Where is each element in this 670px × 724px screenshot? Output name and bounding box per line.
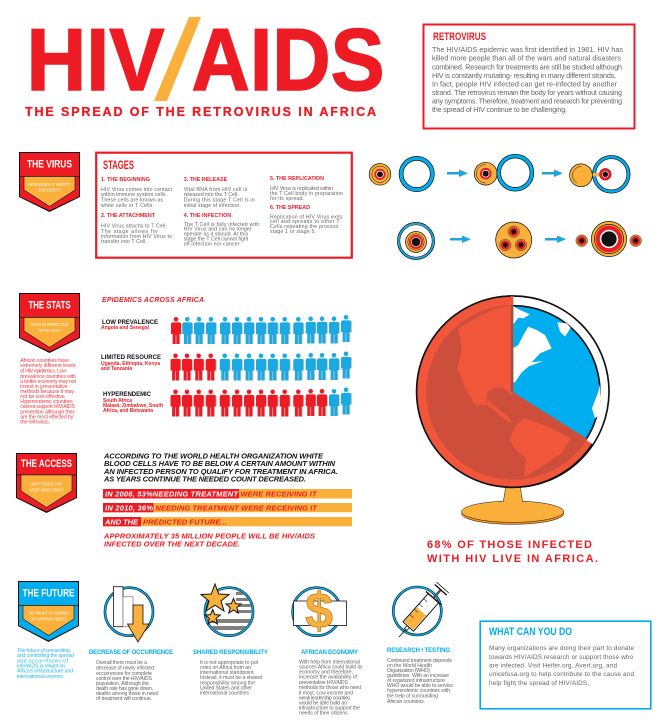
text: research and testing: of organized infrastructure (387, 678, 445, 684)
icon: dollar bill: $ (305, 583, 333, 639)
land in red sector (457, 306, 571, 478)
stage 1: within immune system cells. (101, 192, 167, 198)
text: stats summary: prevention although they (20, 410, 75, 416)
text: access intro: AN INFECTED PERSON TO QUALIFY FOR TREATMENT IN AFRICA. (103, 467, 338, 476)
text: research and testing: Organization (WHO) (387, 668, 430, 674)
diagram: virus spreads (576, 221, 642, 257)
stage 4: off infection nor cancer. (184, 242, 241, 248)
text: future projection (103, 532, 315, 548)
text: african economy: increase the availability of (299, 675, 358, 681)
text: shared responsibility: international countries (200, 691, 249, 697)
stage 1 (101, 177, 173, 209)
text: research and testing: on the World Health (387, 663, 432, 669)
badge: the access (16, 453, 77, 513)
icon: decreasing bars and arrow (105, 587, 153, 642)
diagram: virus attaches to cell (474, 154, 534, 191)
text: stats summary: cannot support HIV/AIDS (20, 404, 76, 410)
text: stats summary: prevalence countries with (20, 374, 76, 380)
arrow (542, 170, 563, 177)
diagram: virus approaches cell (369, 156, 434, 192)
stage 1: These cells are known as (101, 198, 163, 204)
text: shared responsibility: responsibility among the (200, 681, 255, 687)
retrovirus body text: The HIV/AIDS epidemic was first identified in 1981. HIV has (432, 45, 623, 54)
stage 4: HIV Virus and can no longer (184, 227, 252, 233)
stage 3: released into the T Cell. (184, 192, 239, 198)
stage 4: 4. THE INFECTION (184, 213, 231, 219)
white land masses (512, 306, 601, 418)
stage 3: Vital RNA from HIV cell is (184, 187, 248, 193)
stage 3: 3. THE RELEASE (184, 177, 228, 183)
stage 5: 5. THE REPLICATION (270, 176, 324, 182)
diagram: virus replicates (496, 222, 532, 258)
callout: 68 percent (427, 539, 598, 565)
text: decrease of occurrence (96, 660, 158, 702)
text: stats summary: the retrovirus. (20, 420, 50, 426)
stage 6: cell and spreads to other T (270, 219, 340, 225)
bar: 2006: WERE RECEIVING IT (240, 490, 318, 498)
bar: future: AND THE (104, 517, 139, 526)
text: future projection: INFECTED OVER THE NEXT DECADE. (104, 540, 240, 548)
text: african economy: preventative HIV/AIDS (299, 680, 349, 686)
row label: low prevalence: Angola and Senegal (101, 325, 150, 331)
what can you do body text (489, 645, 634, 687)
text: decrease of occurrence: decrease of newly infected (96, 666, 154, 672)
pictogram: hyperendemic (170, 388, 352, 416)
text: african economy: methods for those who need (299, 685, 361, 691)
text: decrease of occurrence: population. Although the (96, 681, 149, 687)
text: research and testing (387, 658, 453, 705)
row label: hyperendemic: Malawi, Zimbabwe, South (103, 403, 163, 409)
stage 3: initial stage of infection. (184, 203, 241, 209)
text: decrease of occurrence: deaths among those in need (96, 691, 158, 697)
panel: stages (96, 153, 352, 258)
arrow (450, 236, 471, 243)
text: african economy (299, 660, 363, 717)
retrovirus body text (432, 45, 623, 114)
text: decrease of occurrence: of treatment will continue. (96, 696, 152, 702)
what can you do body text: towards HIV/AIDS research or support those who (489, 654, 633, 661)
text: access intro: ACCORDING TO THE WORLD HEALTH ORGANIZATION WHITE (103, 452, 324, 460)
text: stats summary (20, 358, 77, 426)
text: shared responsibility: It is not appropriate to put (200, 660, 259, 666)
stage 4 (184, 213, 259, 248)
text: research and testing: guidelines. With an increase (387, 673, 449, 679)
stage 5: HIV Virus is replicated within (270, 186, 333, 192)
text: african economy: needs of their citizens. (299, 711, 349, 717)
badge: the virus (19, 152, 80, 212)
red pie sector (417, 296, 592, 487)
stage 2: The stage allows for (101, 229, 158, 235)
title (26, 10, 384, 109)
text: research and testing: the help of surrounding (387, 694, 438, 700)
row label: limited resource: LIMITED RESOURCE (101, 355, 161, 361)
text: decrease of occurrence: occurrences for complete (96, 671, 152, 677)
row label: hyperendemic: South Africa (103, 398, 132, 404)
what can you do heading: WHAT CAN YOU DO (489, 626, 572, 638)
stage 2: 2. THE ATTACHMENT (101, 213, 156, 219)
darker ocean in red sector (426, 305, 587, 480)
stage 4: The T Cell is fully infected with (184, 222, 259, 228)
diagram: virus inside cell (397, 222, 435, 260)
stage 2: HIV Virus attachs to T Cell. (101, 224, 167, 230)
text: decrease of occurrence: death rate has gone down, (96, 686, 153, 692)
text: stats summary: a better economy may not (20, 379, 77, 385)
stage 5 (270, 176, 343, 202)
text: shared responsibility (200, 660, 262, 697)
stage 6: Replication of HIV Virus exits (270, 215, 343, 221)
badge: the stats: WITH HIV? (38, 328, 61, 333)
arrow (447, 170, 468, 177)
text: stats summary: methods because it may (20, 389, 74, 395)
bar: 2010 (103, 503, 352, 512)
text: future summary: The future of preventing, (17, 648, 71, 654)
retrovirus heading: RETROVIRUS (433, 31, 486, 43)
what can you do body text: unicefusa.org to help contribute to the cause and (489, 671, 634, 678)
row label: limited resource (101, 355, 161, 372)
bar: 2010: IN 2010, 36% (105, 503, 153, 512)
text: future summary: Africa's infrastructure and (17, 669, 73, 675)
text: african economy: it most. Low income and (299, 690, 353, 696)
badge: the virus: THE VIRUS (27, 158, 72, 170)
text: access intro: AS YEARS CONTINUE THE NEEDED COUNT DECREASED. (103, 475, 306, 484)
retrovirus body text: combined. Research for treatments are still be studied although (432, 62, 622, 71)
text: shared responsibility: Instead, it must be a shared (200, 675, 262, 681)
text: stats summary: extremely different levels (20, 363, 76, 369)
text: future projection: APPROXIMATELY 35 MILLION PEOPLE WILL BE HIV/AIDS (103, 532, 315, 540)
text: decrease of occurrence: control over the HIV/AIDS (96, 676, 153, 682)
pictogram: limited resource (170, 352, 352, 380)
text: shared responsibility: international standpoint. (200, 670, 255, 676)
text: african economy: weak leadership counties (299, 696, 350, 702)
badge: the stats: WHO IS INFECTED (30, 322, 69, 327)
what can you do body text: are infected. Visit Heifer.org, Avert.org, and (489, 662, 617, 670)
stages heading: STAGES (103, 160, 134, 172)
row label: limited resource: Uganda, Ethiopia, Kenya (101, 361, 160, 367)
bar: 2006 (103, 489, 352, 498)
globe stand (462, 485, 564, 524)
text: stats summary: are the most effected by (20, 415, 74, 421)
stage 5: for its spread. (270, 196, 304, 202)
text: african economy: infrastructure to support the (299, 706, 360, 712)
stage 3: During this stage T Cell is in (184, 198, 255, 204)
badge: the virus: THE BODY? (38, 188, 61, 192)
globe blue ocean (427, 306, 600, 479)
text: stats summary: Hyperendemic countries (20, 399, 73, 405)
stage 1: HIV Virus comes into contact (101, 187, 173, 193)
text: research and testing: WHO would be able to service (387, 683, 453, 689)
text: research and testing: Continued treatment depends (387, 658, 452, 664)
badge: the stats (19, 293, 80, 353)
text: future summary: and occurrences of (17, 659, 69, 665)
text: stats summary: of HIV epidemics. Low (20, 369, 66, 375)
row label: low prevalence: LOW PREVALENCE (102, 320, 158, 326)
heading: epidemics across africa: EPIDEMICS ACROSS AFRICA (102, 297, 204, 304)
stage 5: the T Cell body in preparation (270, 191, 343, 197)
stage 6: 6. THE SPREAD (270, 205, 310, 211)
heading: shared responsibility: SHARED RESPONSIBILITY (193, 650, 268, 656)
row label: limited resource: and Tanzania (101, 366, 132, 372)
text: future summary: HIV/AIDS is reliant on (17, 664, 65, 670)
row label: hyperendemic (103, 392, 163, 414)
badge: the access: THE ACCESS (21, 458, 72, 470)
title: AIDS (192, 10, 384, 109)
heading: research and testing: RESEARCH / TESTING (387, 648, 450, 654)
badge: the stats: THE STATS (28, 300, 70, 312)
icon: dollar bill (293, 583, 346, 639)
panel: what can you do (480, 621, 651, 709)
text: decrease of occurrence: Overall there must be a (96, 660, 147, 666)
stage 2: information from HIV Virus to (101, 234, 172, 240)
text: african economy: economy and therefore, (299, 670, 353, 676)
stage 4: operate as it should. At this (184, 232, 249, 238)
retrovirus body text: In fact, people HIV infected can get re-infected by another (432, 80, 618, 88)
text: stats summary: African countries have (20, 358, 69, 364)
text: african economy: With help from international (299, 660, 360, 666)
callout: 68 percent: 68% OF THOSE INFECTED (427, 539, 592, 551)
retrovirus body text: HIV is constantly mutating- resulting in many different strands. (432, 71, 616, 80)
text: stats summary: invest in preventative (20, 384, 68, 390)
text: shared responsibility: United States and other (200, 686, 252, 692)
text: research and testing: hyperendemic countries with (387, 688, 450, 694)
badge: the access: KEEP INFECTING? (30, 488, 64, 492)
stage 6: Cells repeating the process (270, 224, 339, 230)
bar: future: PREDICTED FUTURE... (143, 517, 227, 526)
diagram: virus enters cell (570, 156, 630, 193)
panel: retrovirus (424, 24, 634, 128)
globe chart: 68 percent (417, 296, 609, 524)
text: african economy: sources Africa could build its (299, 665, 363, 671)
text: future summary: and controlling the spread (17, 653, 74, 659)
text: access intro: BLOOD CELLS HAVE TO BE BELOW A CERTAIN AMOUNT WITHIN (104, 459, 336, 468)
bar: 2010: NEEDING TREATMENT WERE RECEIVING IT (156, 503, 318, 512)
bar: 2006: IN 2006, 53%NEEDING TREATMENT (105, 490, 239, 498)
text: future summary: international sources. (17, 674, 64, 680)
subtitle: THE SPREAD OF THE RETROVIRUS IN AFRICA (25, 105, 376, 119)
globe outline (417, 296, 592, 487)
icon: stars and stripes (201, 584, 256, 636)
stage 1: white cells or T Cells. (101, 203, 154, 209)
title: HIV (26, 10, 165, 109)
what can you do body text: Many organizations are doing their part to donate (489, 645, 634, 652)
what can you do body text: help fight the spread of HIV/AIDS. (489, 680, 589, 687)
stage 6: stage 1 or stage 5. (270, 229, 316, 235)
row label: low prevalence (101, 320, 158, 331)
text: stats summary: not be cost effective. (20, 394, 66, 400)
retrovirus body text: killed more people than all of the wars and natural disasters (432, 54, 621, 63)
badge: the virus: HOW DOES IT INFECT (28, 182, 71, 187)
heading: african economy: AFRICAN ECONOMY (301, 650, 358, 656)
stage 6 (270, 205, 343, 235)
retrovirus body text: strand. The retrovirus remain the body for years without causing (432, 88, 622, 97)
badge: the future (18, 581, 79, 642)
row label: hyperendemic: Africa, and Botswana (103, 408, 153, 414)
text: african economy: would be able build an (299, 701, 347, 707)
row label: hyperendemic: HYPERENDEMIC (103, 392, 152, 398)
retrovirus body text: any symptoms. Therefore, treatment and research for preventing (432, 96, 622, 105)
pictogram: low prevalence (171, 315, 352, 344)
stage 1: 1. THE BEGINNING (101, 177, 150, 183)
badge: the future: THE FUTURE (22, 588, 74, 600)
badge: the future: SO WHAT IS GOING (28, 610, 69, 616)
callout: 68 percent: WITH HIV LIVE IN AFRICA. (427, 553, 598, 565)
stage 4: stage the T Cell cannot fight (184, 237, 249, 243)
heading: decrease of occurrence: DECREASE OF OCCURRENCE (89, 650, 173, 656)
text: shared responsibility: roles on Africa from an (200, 665, 251, 671)
stage 3 (184, 177, 255, 209)
text: future summary (17, 648, 74, 680)
retrovirus body text: the spread of HIV continue to be challenging. (432, 105, 567, 114)
stage 2: transfer into T Cell. (101, 239, 147, 245)
icon: syringe (392, 581, 450, 644)
text: access intro (103, 452, 338, 484)
globe white outer ring (418, 296, 609, 487)
stage 2 (101, 213, 172, 245)
text: research and testing: African countries. (387, 699, 425, 705)
badge: the access: WHY DOES HIV (31, 482, 63, 486)
badge: the future: TO HAPPEN NEXT? (30, 616, 68, 622)
bar: future (103, 517, 352, 526)
arrow (545, 236, 566, 243)
